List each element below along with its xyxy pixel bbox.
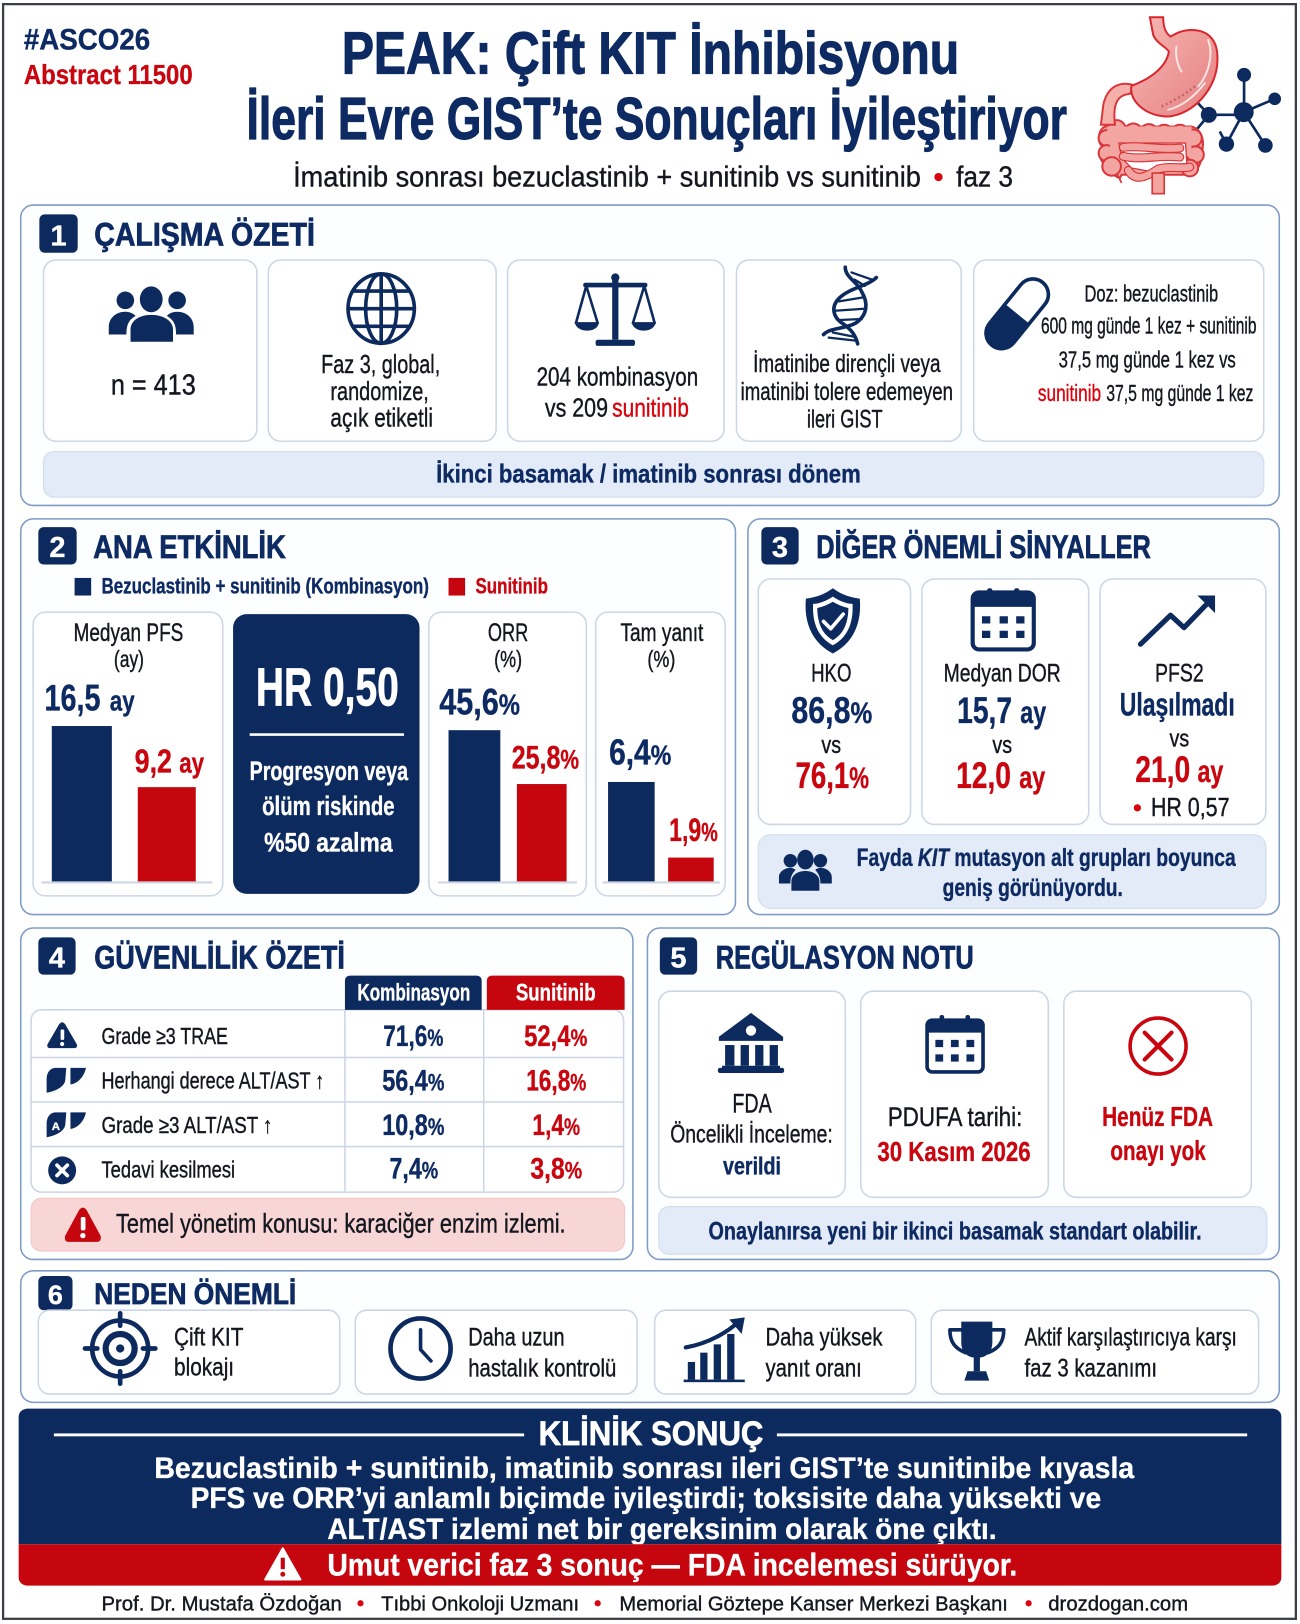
safety table [31,976,625,1192]
card: median PFS bar chart [33,612,223,896]
column header: sunitinib [487,976,625,1010]
icon: people [779,850,832,891]
heading: regulatory note: REGÜLASYON NOTU [716,939,974,975]
callout: hazard ratio: Progresyon veya [250,756,409,786]
dosing text: sunitinib [1038,380,1101,406]
card: ORR bar chart: ORR [488,620,528,647]
card: arms [508,260,724,441]
header tag: conference and abstract [24,24,193,90]
section badge 4 [38,937,76,975]
PDUFA text: 30 Kasım 2026 [877,1136,1031,1167]
row: discontinuation: Tedavi kesilmesi [102,1157,235,1183]
row: discontinuation: 7,4% [389,1153,438,1186]
response rate text: yanıt oranı [765,1355,862,1382]
median DOR text: ay [1019,760,1046,795]
card: phase 3 win [931,1310,1259,1394]
icon: DNA helix [824,267,876,344]
legend: Bezuclastinib + sunitinib (Kombinasyon) [102,573,429,598]
footer credit: Tıbbi Onkoloji Uzmanı [381,1593,579,1616]
subtitle: faz 3 [956,161,1013,193]
median DOR text: Medyan DOR [944,661,1061,687]
panel 5: regulatory note [647,928,1279,1259]
callout: hazard ratio: %50 azalma [264,827,393,857]
icon: calendar [973,588,1034,649]
column header: sunitinib: Sunitinib [516,980,596,1006]
dual KIT text: Çift KIT [174,1324,243,1351]
row: grade 3 TRAE: 71,6% [383,1020,443,1053]
card: FDA priority review [659,991,845,1197]
PDUFA text [877,1102,1031,1167]
card: dual KIT blockade [38,1310,340,1394]
PFS2 text: Ulaşılmadı [1120,687,1235,723]
panel 4: safety summary [21,928,633,1259]
section badge 1: 1 [50,220,67,252]
heading: other signals: DİĞER ÖNEMLİ SİNYALLER [816,529,1151,565]
section badge 5: 5 [670,942,687,974]
card: PFS2 [1100,579,1266,824]
arms text: 204 kombinasyon [537,363,698,391]
header tag: conference and abstract: #ASCO26 [24,24,150,57]
icon: warning [265,1548,300,1579]
icon: capsule [980,273,1055,355]
conclusion text [154,1452,1135,1546]
phase 3 win text: faz 3 kazanımı [1024,1355,1157,1382]
row: grade 3 ALT/AST [47,1109,580,1142]
row: grade 3 ALT/AST: Grade ≥3 ALT/AST ↑ [102,1112,272,1138]
panel 2: main efficacy [21,519,735,915]
alert: key management issue [31,1198,625,1251]
population text: ileri GIST [807,407,883,434]
row: discontinuation: 3,8% [530,1153,582,1186]
row: discontinuation [48,1153,582,1186]
card: sample size [44,260,257,441]
card: complete response bar chart: 6,4% [609,731,671,772]
PFS2 text: vs [1169,726,1189,753]
study design text: Faz 3, global, [321,351,440,379]
heading: study summary: ÇALIŞMA ÖZETİ [94,216,315,252]
row: any grade ALT/AST: 16,8% [526,1065,586,1098]
strip: approval note [659,1207,1267,1254]
card: longer disease control [355,1310,637,1394]
section badge 6 [38,1276,73,1310]
icon: cross in circle [1130,1018,1186,1074]
PFS2 text: 21,0 [1135,748,1190,790]
FDA text: verildi [723,1154,781,1180]
subgroup note text: geniş görünüyordu. [943,875,1123,902]
callout: hazard ratio [233,614,420,894]
section badge 1 [39,214,78,253]
heading: why it matters: NEDEN ÖNEMLİ [94,1278,296,1311]
legend: Sunitinib [475,573,548,598]
card: median PFS bar chart: (ay) [114,646,144,672]
icon: trend arrow [1140,596,1215,644]
icon: scales [575,273,656,346]
PFS2 text: ay [1197,754,1224,789]
median DOR text: vs [992,732,1012,759]
icon: institution building [718,1013,784,1073]
footer credit: Prof. Dr. Mustafa Özdoğan [102,1593,342,1616]
row: grade 3 TRAE [47,1020,587,1053]
card: median PFS bar chart: ay [110,686,135,717]
median DOR text: ay [1020,695,1047,730]
no approval text: Henüz FDA [1102,1101,1213,1132]
PFS2 text [1120,661,1235,822]
icon: people [109,286,194,342]
PFS2 text: HR 0,57 [1151,794,1230,822]
row: grade 3 ALT/AST: A [52,1121,60,1133]
callout: hazard ratio: ölüm riskinde [262,791,395,821]
banner text: Umut verici faz 3 sonuç — FDA incelemesi sürüyor. [327,1547,1017,1582]
card: higher response rate [655,1310,916,1394]
population text: imatinibi tolere edemeyen [741,379,953,406]
panel 3: other signals [748,519,1279,915]
study design text [321,351,440,433]
disease control text [791,661,872,796]
study design text: açık etiketli [330,405,433,433]
subgroup note text [857,845,1236,902]
card: median PFS bar chart: 16,5 [45,677,100,718]
section badge 5 [660,937,697,975]
icon: clock [391,1318,451,1379]
arms text [537,363,698,422]
no approval text: onayı yok [1110,1135,1206,1166]
callout: hazard ratio: HR 0,50 [256,657,399,717]
icon: target [85,1313,155,1384]
heading: main efficacy: ANA ETKİNLİK [93,529,286,565]
column header: combination [345,976,482,1010]
dosing text: 37,5 mg günde 1 kez vs [1059,347,1236,373]
strip: KIT subgroups note [758,835,1266,908]
conclusion text: Bezuclastinib + sunitinib, imatinib sonrası ileri GIST’te sunitinibe kıyasla [154,1452,1135,1485]
row: grade 3 TRAE: Grade ≥3 TRAE [102,1023,228,1049]
PFS2 text: PFS2 [1155,661,1204,687]
panel 1: study summary [21,205,1279,505]
icon: globe [348,274,414,343]
study design text: randomize, [330,378,429,406]
disease control text: 76,1% [796,754,869,796]
response rate text [765,1324,883,1382]
arms text: vs 209 [545,394,608,422]
row: any grade ALT/AST [47,1065,586,1098]
disease control text: hastalık kontrolü [468,1355,616,1382]
icon: stomach, intestine and molecule [1099,17,1281,194]
card: ORR bar chart: 25,8% [512,740,579,775]
arms text: sunitinib [612,394,689,422]
title: PEAK: Çift KIT İnhibisyonu [342,21,959,87]
icon: calendar [927,1015,983,1072]
footer credit [102,1593,1188,1616]
dual KIT text [174,1324,243,1381]
icon: growth chart [684,1317,745,1382]
conclusion text: ALT/AST izlemi net bir gereksinim olarak öne çıktı. [327,1513,996,1546]
card: population [736,260,961,441]
heading: safety summary: GÜVENLİLİK ÖZETİ [94,939,345,975]
subtitle: İmatinib sonrası bezuclastinib + sunitinib vs sunitinib [293,160,921,193]
card: dosing [974,260,1264,441]
alert: key management issue: Temel yönetim konusu: karaciğer enzim izlemi. [116,1209,566,1238]
section badge 2: 2 [49,532,66,564]
strip: treatment line: İkinci basamak / imatinib sonrası dönem [436,461,861,489]
icon: trophy [950,1322,1004,1381]
card: median DOR [922,579,1089,824]
card: ORR bar chart: 45,6% [439,681,520,723]
card: ORR bar chart: (%) [494,646,522,672]
card: study design [268,260,496,441]
response rate text: Daha yüksek [765,1324,883,1351]
dosing text: Doz: bezuclastinib [1085,280,1218,306]
disease control text: Daha uzun [468,1324,565,1351]
icon: shield [806,588,860,654]
header tag: conference and abstract: Abstract 11500 [24,59,193,90]
disease control text [468,1324,616,1382]
population text [741,349,953,434]
population text: İmatinibe dirençli veya [753,349,941,378]
card: complete response bar chart: Tam yanıt [620,620,703,647]
FDA text [670,1088,833,1180]
section badge 2 [38,527,77,564]
card: complete response bar chart: (%) [647,646,675,672]
dual KIT text: blokajı [174,1354,234,1381]
FDA text: Öncelikli İnceleme: [670,1119,833,1148]
card: median PFS bar chart: Medyan PFS [74,620,183,647]
disease control text: 86,8% [791,689,872,731]
card: median PFS bar chart: ay [179,748,204,780]
row: grade 3 TRAE: 52,4% [524,1020,587,1053]
column header: combination: Kombinasyon [357,980,470,1006]
card: no FDA approval [1064,991,1251,1197]
card: ORR bar chart [429,612,586,896]
title [247,21,1067,152]
footer credit: drozdogan.com [1048,1593,1188,1616]
median DOR text: 15,7 [957,689,1012,731]
panel: clinical conclusion [19,1409,1281,1586]
panel 6: why it matters [21,1271,1279,1402]
phase 3 win text: Aktif karşılaştırıcıya karşı [1024,1324,1237,1351]
card: disease control rate [758,579,911,824]
median DOR text [944,661,1061,796]
FDA text: FDA [732,1088,772,1118]
card: complete response bar chart: 1,9% [669,812,718,848]
phase 3 win text [1024,1324,1237,1382]
conclusion text: PFS ve ORR’yi anlamlı biçimde iyileştirdi; toksisite daha yüksekti ve [191,1482,1101,1515]
section badge 6: 6 [48,1280,63,1310]
row: grade 3 ALT/AST: 1,4% [532,1109,580,1142]
footer credit: Memorial Göztepe Kanser Merkezi Başkanı [619,1593,1008,1616]
banner: promising result [19,1544,1281,1586]
card: median PFS bar chart: 9,2 [135,744,172,781]
strip: treatment line [44,452,1264,497]
card: complete response bar chart [596,612,725,896]
dosing text [1038,280,1256,406]
row: any grade ALT/AST: Herhangi derece ALT/AST ↑ [102,1068,324,1094]
heading: clinical conclusion: KLİNİK SONUÇ [539,1415,763,1453]
section badge 3 [761,527,799,564]
row: any grade ALT/AST: 56,4% [382,1065,444,1098]
section badge 3: 3 [772,532,788,564]
no approval text [1102,1101,1213,1166]
disease control text: vs [821,732,841,759]
row: grade 3 ALT/AST: 10,8% [382,1109,444,1142]
median DOR text: 12,0 [956,754,1011,796]
disease control text: HKO [811,661,851,687]
section badge 4: 4 [49,942,65,974]
card: PDUFA date [861,991,1048,1197]
PDUFA text: PDUFA tarihi: [888,1102,1022,1132]
sample size text: n = 413 [111,370,196,402]
